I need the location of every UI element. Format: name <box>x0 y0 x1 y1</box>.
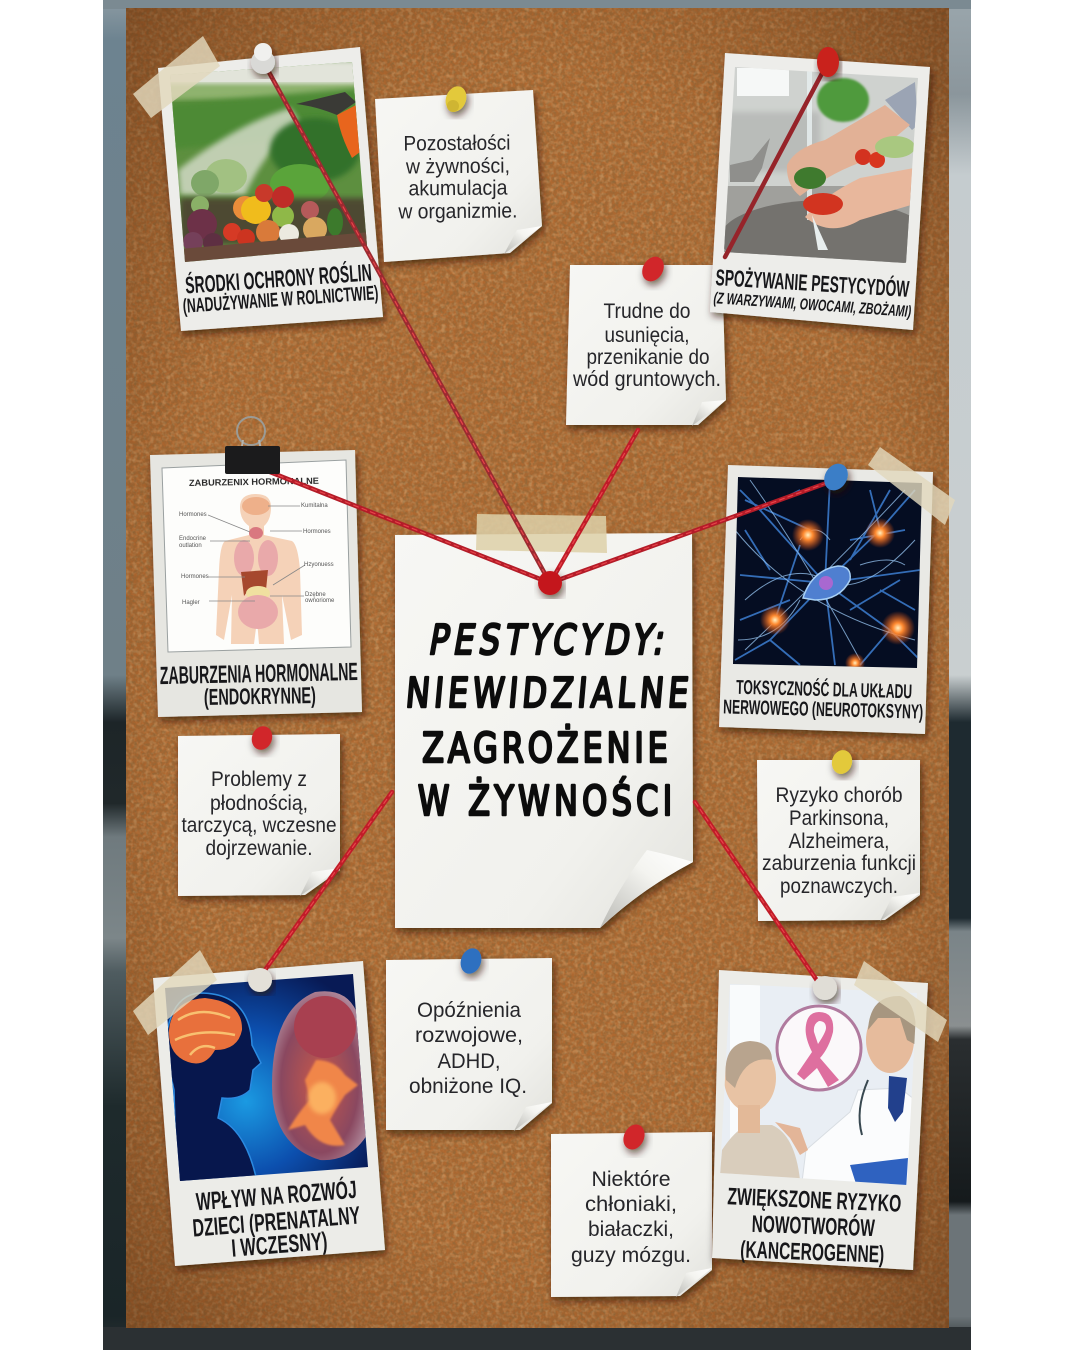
diagram: human body: Hzyonuess <box>304 562 334 568</box>
title: PESTYCYDY: <box>426 616 669 664</box>
photo: child and foetus <box>165 974 368 1181</box>
diagram: human body: outlation <box>179 543 202 549</box>
note: hard to remove: wód gruntowych. <box>572 368 721 391</box>
pin: blue neuro <box>819 459 853 495</box>
diagram: human body <box>179 476 335 644</box>
note: hard to remove: przenikanie do <box>586 346 710 369</box>
label: (NADUŻYWANIE W ROLNICTWIE) <box>182 281 379 318</box>
label: DZIECI (PRENATALNY <box>192 1201 361 1243</box>
pin: white top left <box>251 43 275 74</box>
label <box>723 675 923 724</box>
cork board <box>126 8 949 1328</box>
label: (ENDOKRYNNE) <box>204 682 316 710</box>
note: lymphoma <box>551 1132 712 1297</box>
note: ADHD: Opóźnienia <box>417 999 521 1022</box>
label <box>713 263 912 321</box>
note: fertility: Problemy z <box>211 768 307 791</box>
note: fertility: dojrzewanie. <box>206 837 312 860</box>
note: lymphoma: białaczki, <box>588 1218 674 1241</box>
photo: neurons <box>733 477 922 668</box>
note: fertility: płodnością, <box>210 792 308 815</box>
photo card: neurotoxicity <box>719 465 933 734</box>
label <box>182 259 379 318</box>
label: WPŁYW NA ROZWÓJ <box>195 1174 358 1216</box>
title: W ŻYWNOŚCI <box>418 776 672 825</box>
diagram: human body: Hormones <box>303 529 331 535</box>
diagram: human body: Hagler <box>182 600 200 606</box>
note: hard to remove: Trudne do <box>604 300 690 323</box>
label: (KANCEROGENNE) <box>740 1237 885 1269</box>
pin: yellow <box>442 83 470 115</box>
label: ŚRODKI OCHRONY ROŚLIN <box>184 259 373 300</box>
note: Parkinson: Parkinsona, <box>789 807 889 830</box>
label: ZWIĘKSZONE RYZYKO <box>727 1183 902 1218</box>
pin: blue ADHD <box>457 945 485 977</box>
note: residues: w organizmie. <box>397 199 518 224</box>
pin: white child <box>248 968 272 992</box>
note: Parkinson <box>757 760 920 921</box>
diagram: human body: Kumitalna <box>301 503 328 509</box>
label: (Z WARZYWAMI, OWOCAMI, ZBOŻAMI) <box>713 289 912 321</box>
central note with title <box>395 533 693 928</box>
photo card: cancer <box>712 970 928 1270</box>
tapes on photos <box>133 36 955 1042</box>
note: Parkinson: Ryzyko chorób <box>776 784 902 807</box>
note: Parkinson: poznawczych. <box>780 875 898 898</box>
pin: red fertility <box>248 723 276 753</box>
title: ZAGROŻENIE <box>422 724 668 772</box>
photo card: plant protection <box>158 47 383 331</box>
label <box>727 1183 902 1269</box>
photo: patient and doctor <box>720 984 917 1185</box>
label: NERWOWEGO (NEUROTOKSYNY) <box>723 696 923 724</box>
diagram: human body: Endocrine <box>179 536 207 542</box>
pin: yellow parkinson <box>829 748 855 776</box>
photo: sprayed vegetables <box>170 62 367 262</box>
label: I WCZESNY) <box>230 1227 328 1263</box>
note: ADHD: obniżone IQ. <box>409 1075 527 1098</box>
diagram: human body: Dzębne <box>305 592 326 598</box>
note: hard to remove <box>566 265 726 426</box>
pin: centre <box>538 571 562 595</box>
red strings <box>265 62 835 982</box>
label: NOWOTWORÓW <box>751 1210 875 1242</box>
diagram: human body: ZABURZENIX HORMONALNE <box>189 476 319 488</box>
note: hard to remove: usunięcia, <box>604 324 690 347</box>
photo: hands washing vegetables <box>724 67 918 263</box>
photo card: child development <box>153 961 385 1266</box>
title <box>404 616 690 825</box>
note: residues <box>375 90 542 262</box>
diagram: human body: ownoriome <box>305 598 335 604</box>
photo card: hormonal <box>150 450 362 717</box>
label <box>160 658 358 710</box>
note: ADHD: rozwojowe, <box>415 1024 523 1047</box>
note: fertility: tarczycą, wczesne <box>182 814 336 837</box>
diagram: human body: Hormones <box>179 512 207 518</box>
note: residues: akumulacja <box>408 177 508 200</box>
note: lymphoma: guzy mózgu. <box>571 1244 691 1267</box>
note: residues: Pozostałości <box>403 132 511 155</box>
diagram: human body: Hormones <box>181 574 209 580</box>
pin: white cancer <box>813 976 837 1000</box>
label: TOKSYCZNOŚĆ DLA UKŁADU <box>736 675 912 703</box>
pin: red note <box>638 253 668 285</box>
note: residues: w żywności, <box>405 155 510 178</box>
label: SPOŻYWANIE PESTYCYDÓW <box>715 263 910 302</box>
title: NIEWIDZIALNE <box>404 669 690 717</box>
photo card: washing food <box>710 53 930 330</box>
note: Parkinson: Alzheimera, <box>788 830 890 853</box>
note: lymphoma: chłoniaki, <box>585 1193 677 1216</box>
binder clip <box>225 417 280 474</box>
note: Parkinson: zaburzenia funkcji <box>762 852 916 875</box>
note: ADHD: ADHD, <box>438 1050 500 1073</box>
label: ZABURZENIA HORMONALNE <box>160 658 358 690</box>
tape: centre <box>476 514 607 553</box>
note: lymphoma: Niektóre <box>592 1168 670 1191</box>
label <box>192 1174 361 1263</box>
note: fertility <box>178 734 340 896</box>
pin: red top right <box>817 47 839 77</box>
note: ADHD <box>386 958 552 1131</box>
pin: red lymphoma <box>619 1121 649 1153</box>
